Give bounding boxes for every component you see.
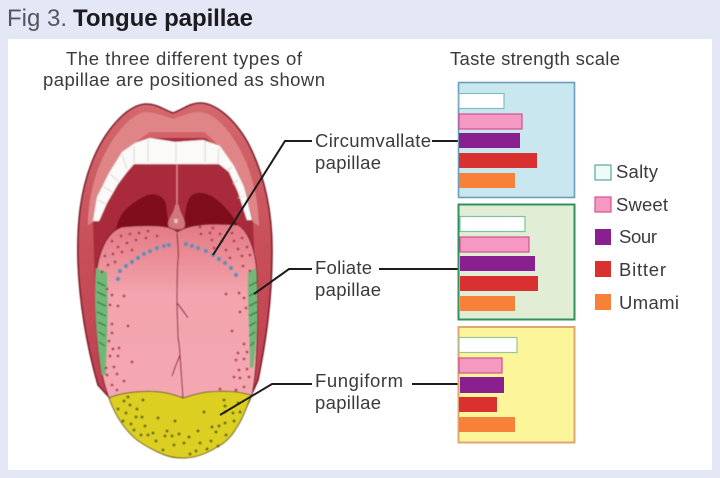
panel: foliate bars (458, 204, 574, 320)
panel: circumvallate bars (458, 82, 574, 198)
tongue (96, 224, 257, 458)
foliate ridges (97, 282, 257, 346)
legend: Sour (619, 226, 657, 247)
rear and side papillae (101, 226, 251, 391)
label: circumvallate: Circumvallate (315, 130, 431, 151)
label: circumvallate second line: papillae (315, 152, 381, 173)
lips (78, 103, 272, 420)
legend: Umami (619, 292, 679, 313)
connector: fungiform to scale (412, 383, 458, 385)
legend (595, 161, 679, 313)
upper teeth (93, 138, 252, 221)
foliate region left (95, 268, 108, 375)
subtitle line two: papillae are positioned as shown (43, 69, 325, 90)
foliate region right (248, 268, 257, 368)
inner lip highlight (88, 112, 259, 226)
yellow fungiform tip (109, 391, 251, 458)
legend: Salty (616, 161, 659, 182)
circumvallate papillae (116, 242, 238, 281)
tongue fissure (172, 233, 188, 398)
label: fungiform: Fungiform (315, 370, 403, 391)
throat left (116, 194, 171, 230)
subtitle: The three different types of (66, 48, 303, 69)
tooth gaps (98, 140, 244, 204)
uvula (168, 205, 185, 229)
label: foliate second line: papillae (315, 279, 381, 300)
illustration: mouth and tongue (78, 103, 272, 458)
palate centre line (176, 164, 178, 214)
title bold: Tongue papillae (73, 5, 253, 32)
label: foliate: Foliate (315, 257, 372, 278)
connector: foliate to scale (379, 268, 458, 270)
panel: fungiform bars (458, 327, 574, 442)
scale heading: Taste strength scale (450, 48, 620, 69)
connector: circumvallate to scale (432, 140, 458, 142)
leader line: fungiform (220, 384, 312, 415)
leader line: circumvallate (213, 141, 312, 255)
yellow tip papillae (116, 396, 242, 456)
throat right (183, 193, 240, 230)
mouth interior (93, 138, 256, 290)
legend: Bitter (619, 259, 666, 280)
title: Fig 3. (7, 5, 67, 32)
legend: Sweet (616, 194, 668, 215)
leader line: foliate (254, 269, 312, 294)
label: fungiform second line: papillae (315, 392, 381, 413)
